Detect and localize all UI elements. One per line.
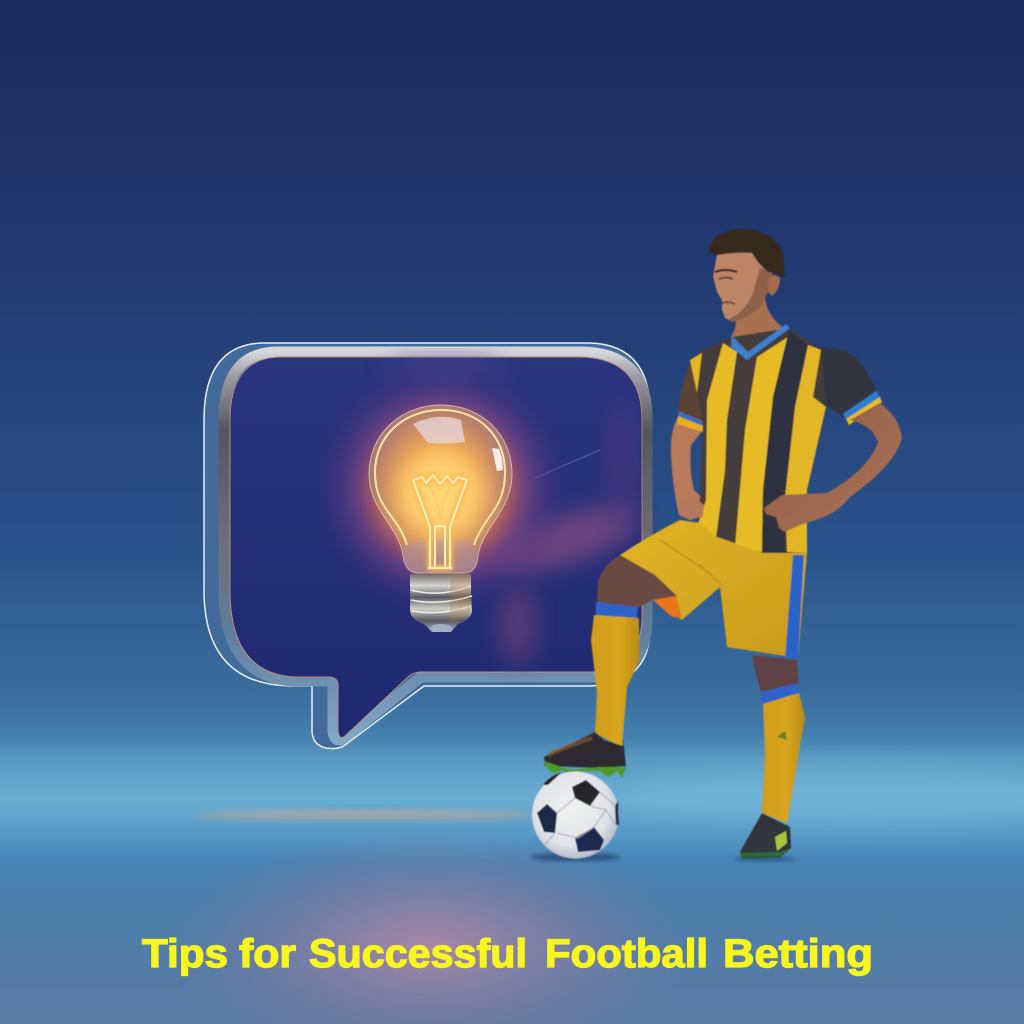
chrome rim [224,352,647,740]
sock band [596,602,638,618]
sock band [761,683,799,704]
torso dark base [690,328,826,553]
shorts [620,520,807,658]
far sleeve [678,362,703,423]
boot logo [775,831,787,851]
bulb glow [314,360,570,616]
title [142,932,873,976]
speech bubble with light bulb [204,343,650,749]
light bulb [314,360,570,632]
boot sole [740,848,791,859]
eye and brow [715,270,737,272]
bubble panel [230,357,642,738]
ear [768,275,780,296]
football [530,772,620,861]
head [709,229,785,322]
football player [530,229,902,862]
filament [413,475,467,568]
boot studs [544,761,626,778]
yellow stripe C [735,337,788,552]
jaw shadow [729,268,772,322]
thigh and knee [597,555,677,608]
orange lining [653,596,682,618]
sock logo [777,731,787,740]
knee [752,655,799,694]
standing leg [740,655,805,859]
bulb glass [369,405,512,573]
raised leg [544,555,677,778]
title: Successful [309,932,527,976]
boot [740,813,791,858]
neck [730,296,783,356]
yellow stripe A [698,343,737,538]
boot [544,732,626,768]
hair [709,229,785,278]
collar [731,324,790,360]
title: for [239,932,296,976]
player's right arm [671,417,704,520]
bulb screw base [410,574,472,632]
sock [591,615,640,747]
dark stripe D [762,330,808,553]
bubble frame [204,343,650,749]
title: Football [545,932,708,976]
glowing inner outline [375,410,505,545]
sock [762,693,805,823]
shirt [677,324,882,553]
player's right hand [680,495,704,518]
near sleeve [808,345,877,417]
ball patches [537,772,619,852]
title: Tips [142,932,228,976]
player's left arm and hand [764,403,902,532]
mouth [722,302,735,304]
panel light reflections [385,356,644,665]
face [713,250,775,322]
left edge stripe [690,353,702,393]
yellow stripe E [785,345,826,553]
glass highlights [413,417,465,443]
blue stripe [785,555,804,658]
title: Betting [723,932,873,976]
